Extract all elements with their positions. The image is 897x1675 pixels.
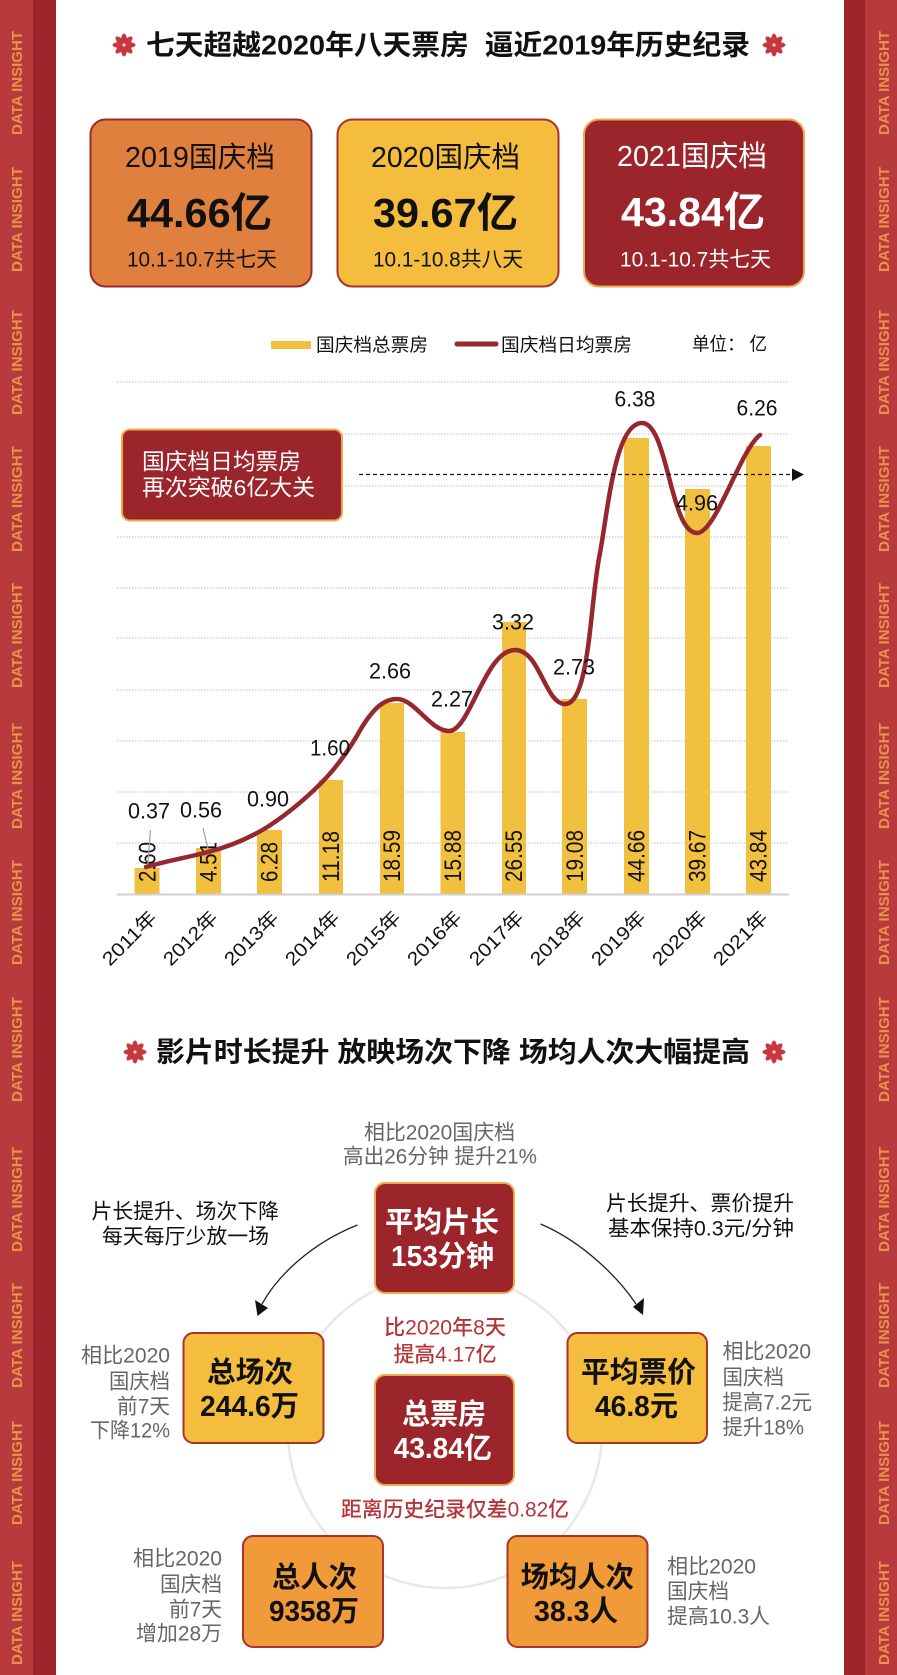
note: price comparison (722, 1340, 812, 1440)
bar value labels: 2.60 (134, 842, 162, 882)
note: per-screening comparison: 相比2020 (667, 1556, 756, 1578)
note: admissions comparison: 前7天 (169, 1598, 222, 1622)
note: screenings comparison: 下降12% (90, 1420, 170, 1442)
daily average value labels: 0.90 (247, 786, 289, 812)
title: section 2: 影片时长提升 放映场次下降 场均人次大幅提高 (156, 1036, 750, 1068)
note: price comparison: 提升18% (722, 1416, 804, 1440)
right red border: DATA INSIGHT (876, 723, 893, 829)
card: 2019 box office: 2019国庆档 (125, 141, 275, 174)
daily average value labels: 2.73 (553, 654, 595, 680)
right red border: DATA INSIGHT (876, 1561, 893, 1665)
year axis labels: 2020年 (648, 907, 711, 970)
note: right relationship: 片长提升、票价提升 (606, 1192, 794, 1216)
daily average value labels (128, 386, 778, 824)
left red border: DATA INSIGHT (9, 583, 26, 688)
daily average value labels: 6.38 (614, 386, 656, 412)
year axis labels: 2018年 (526, 907, 589, 970)
box: admissions per screening (508, 1536, 648, 1647)
daily average value labels: 4.96 (676, 490, 718, 516)
note: screenings comparison: 前7天 (117, 1396, 170, 1418)
card: 2020 box office: 39.67亿 (373, 190, 518, 236)
left red border: DATA INSIGHT (9, 31, 26, 135)
left red border: DATA INSIGHT (9, 1147, 26, 1252)
arrow: right curve (541, 1224, 644, 1315)
callout: daily box office breaks 6亿: 再次突破6亿大关 (142, 476, 315, 500)
note: increase vs 2020: 提高4.17亿 (394, 1344, 497, 1366)
chart legend: 国庆档总票房 (316, 334, 428, 356)
daily average value labels: 1.60 (310, 736, 350, 760)
right red border: DATA INSIGHT (876, 1147, 893, 1252)
arrow: left curve (255, 1225, 358, 1316)
card: 2020 box office: 2020国庆档 (371, 141, 520, 174)
daily average value labels: 2.27 (431, 686, 473, 712)
box: total admissions (243, 1536, 383, 1647)
title: section 1: 七天超越2020年八天票房 逼近2019年历史纪录 (146, 30, 750, 60)
left red border: DATA INSIGHT (9, 446, 26, 552)
year axis labels: 2021年 (709, 907, 772, 970)
year axis labels: 2015年 (342, 907, 405, 970)
right red border: DATA INSIGHT (876, 167, 893, 272)
left red border (0, 0, 56, 1675)
box: total box office (375, 1375, 514, 1485)
note: left relationship: 片长提升、场次下降 (92, 1200, 279, 1224)
left red border: DATA INSIGHT (9, 723, 26, 829)
box: total screenings: 244.6万 (200, 1391, 299, 1423)
callout: daily box office breaks 6亿 (122, 430, 342, 520)
card: 2020 box office: 10.1-10.8共八天 (373, 248, 523, 272)
bar value labels (134, 830, 772, 882)
box: total screenings: 总场次 (207, 1356, 293, 1389)
chart legend: 单位： 亿 (692, 334, 767, 354)
year axis labels (98, 907, 772, 970)
bar value labels: 15.88 (440, 830, 467, 882)
card: 2021 box office: 43.84亿 (621, 189, 765, 235)
note: admissions comparison: 相比2020 (133, 1548, 222, 1570)
daily average value labels: 2.66 (369, 658, 411, 684)
bar value labels: 6.28 (256, 842, 284, 882)
arrow: 6亿 reference line (359, 468, 804, 481)
year axis labels: 2011年 (98, 907, 161, 970)
note: runtime comparison: 相比2020国庆档 (364, 1122, 515, 1144)
left red border: DATA INSIGHT (9, 167, 26, 272)
year axis labels: 2019年 (587, 907, 650, 970)
year axis labels: 2013年 (220, 907, 283, 970)
card: 2021 box office (584, 120, 804, 286)
note: price comparison: 提高7.2元 (722, 1392, 812, 1414)
year axis labels: 2014年 (281, 907, 344, 970)
bar value labels: 11.18 (318, 831, 345, 882)
right red border: DATA INSIGHT (876, 997, 893, 1102)
chart legend (271, 334, 767, 356)
box: average ticket price: 46.8元 (595, 1391, 678, 1423)
note: per-screening comparison (667, 1556, 770, 1628)
bar value labels: 19.08 (562, 830, 589, 882)
right red border: DATA INSIGHT (876, 1283, 893, 1388)
right red border: DATA INSIGHT (876, 446, 893, 552)
year axis labels: 2016年 (403, 907, 466, 970)
note: admissions comparison (133, 1548, 222, 1646)
note: left relationship: 每天每厅少放一场 (102, 1226, 269, 1248)
year axis labels: 2012年 (159, 907, 222, 970)
note: runtime comparison: 高出26分钟 提升21% (343, 1146, 537, 1168)
note: per-screening comparison: 国庆档 (667, 1580, 729, 1604)
note: price comparison: 相比2020 (722, 1340, 811, 1364)
box: average runtime: 153分钟 (391, 1240, 494, 1273)
right red border: DATA INSIGHT (876, 1421, 893, 1525)
note: admissions comparison: 国庆档 (160, 1574, 222, 1596)
right red border: DATA INSIGHT (876, 31, 893, 135)
card: 2020 box office (338, 120, 558, 286)
card: 2019 box office: 10.1-10.7共七天 (127, 248, 277, 272)
year axis labels: 2017年 (465, 907, 528, 970)
bar value labels: 43.84 (746, 830, 772, 882)
note: price comparison: 国庆档 (722, 1366, 784, 1390)
left red border: DATA INSIGHT (9, 1283, 26, 1388)
daily average value labels: 0.56 (180, 798, 222, 822)
card: 2019 box office: 44.66亿 (127, 190, 272, 236)
right red border: DATA INSIGHT (876, 310, 893, 415)
right red border: DATA INSIGHT (876, 583, 893, 688)
box: admissions per screening: 场均人次 (521, 1561, 634, 1594)
note: increase vs 2020 (384, 1316, 506, 1366)
box: total admissions: 总人次 (272, 1561, 357, 1594)
note: right relationship: 基本保持0.3元/分钟 (608, 1218, 794, 1240)
diagram ring (288, 1274, 602, 1588)
note: admissions comparison: 增加28万 (136, 1622, 222, 1646)
note: screenings comparison (81, 1344, 170, 1442)
chart legend: 国庆档日均票房 (501, 334, 632, 356)
left red border: DATA INSIGHT (9, 860, 26, 965)
note: screenings comparison: 国庆档 (109, 1370, 170, 1394)
box: total screenings (184, 1333, 324, 1443)
daily average line (146, 423, 760, 867)
right red border: DATA INSIGHT (876, 860, 893, 965)
left red border: DATA INSIGHT (9, 1421, 26, 1525)
daily average value labels: 6.26 (736, 396, 778, 420)
daily average value labels: 3.32 (492, 610, 534, 634)
left red border: DATA INSIGHT (9, 310, 26, 415)
daily average value labels: 0.37 (128, 798, 170, 824)
bar value labels: 44.66 (624, 830, 650, 882)
box: total admissions: 9358万 (269, 1596, 359, 1628)
card: 2021 box office: 2021国庆档 (617, 140, 767, 173)
bar value labels: 26.55 (501, 830, 528, 882)
box: total box office: 43.84亿 (394, 1432, 492, 1465)
callout: daily box office breaks 6亿: 国庆档日均票房 (142, 450, 301, 474)
note: screenings comparison: 相比2020 (81, 1344, 170, 1368)
note: increase vs 2020: 比2020年8天 (384, 1316, 506, 1340)
box: average runtime: 平均片长 (385, 1206, 499, 1239)
box: average ticket price: 平均票价 (581, 1356, 696, 1389)
note: per-screening comparison: 提高10.3人 (667, 1606, 770, 1628)
combo chart: box office bars and daily average line (98, 382, 789, 970)
bar value labels: 4.51 (196, 842, 222, 882)
note: right relationship (606, 1192, 794, 1240)
box: total box office: 总票房 (402, 1398, 486, 1431)
card: 2019 box office (90, 120, 312, 286)
note: left relationship (92, 1200, 279, 1248)
bar value labels: 39.67 (684, 830, 712, 882)
card: 2021 box office: 10.1-10.7共七天 (620, 248, 771, 272)
bar value labels: 18.59 (379, 830, 406, 882)
left red border: DATA INSIGHT (9, 1561, 26, 1665)
box: admissions per screening: 38.3人 (534, 1596, 618, 1628)
right red border (844, 0, 897, 1675)
leader lines (148, 828, 209, 867)
note: gap to record: 距离历史纪录仅差0.82亿 (341, 1498, 569, 1522)
box: average runtime (375, 1183, 514, 1293)
bars (134, 438, 771, 894)
left red border: DATA INSIGHT (9, 997, 26, 1102)
box: average ticket price (568, 1333, 707, 1443)
note: runtime comparison (343, 1122, 537, 1168)
